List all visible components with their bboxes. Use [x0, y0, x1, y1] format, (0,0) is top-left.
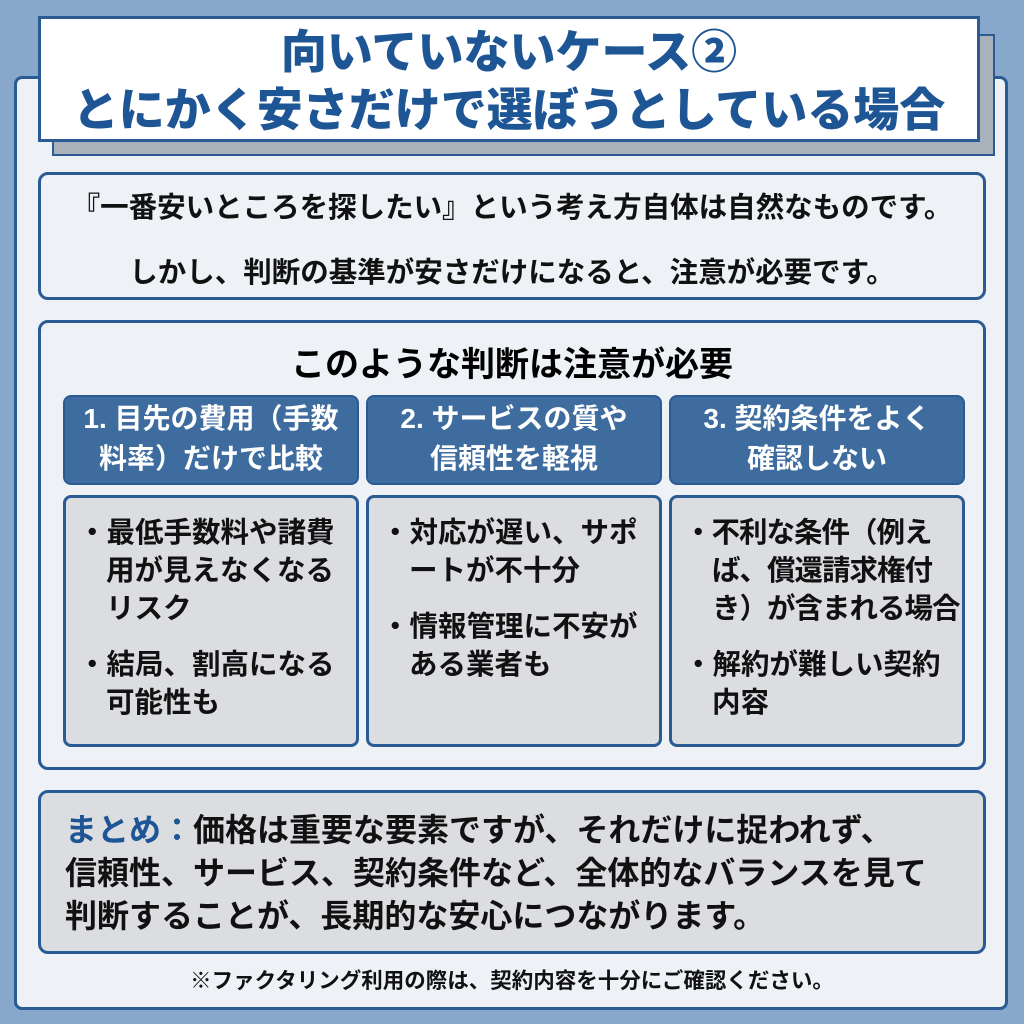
header 3: 3. 契約条件をよく [703, 403, 931, 434]
header 3 [669, 395, 965, 485]
title: 向いていないケース② [281, 26, 737, 78]
content 2 [366, 495, 662, 747]
content 1: ・最低手数料や諸費用が見えなくなるリスク [78, 517, 335, 625]
content 3 [669, 495, 965, 747]
content 2: ・対応が遅い、サポートが不十分 [381, 517, 638, 587]
header 1: 料率）だけで比較 [99, 443, 323, 474]
content 1 [63, 495, 359, 747]
content 3: ・不利な条件（例えば、償還請求権付き）が含まれる場合 [684, 517, 960, 625]
header 2: 2. サービスの質や [400, 403, 628, 434]
header 1 [63, 395, 359, 485]
panel heading: このような判断は注意が必要 [291, 346, 733, 384]
intro text box: しかし、判断の基準が安さだけになると、注意が必要です。 [129, 257, 895, 289]
footnote: ※ファクタリング利用の際は、契約内容を十分にご確認ください。 [190, 969, 834, 993]
summary box: 判断することが、長期的な安心につながります。 [65, 898, 765, 934]
header 2 [366, 395, 662, 485]
header 1: 1. 目先の費用（手数 [83, 403, 339, 434]
content 2: ・情報管理に不安がある業者も [381, 611, 638, 681]
intro text box [38, 172, 986, 300]
summary box: まとめ：価格は重要な要素ですが、それだけに捉われず、 [65, 812, 893, 848]
title [38, 16, 980, 142]
content 1: ・結局、割高になる可能性も [78, 649, 335, 719]
title: とにかく安さだけで選ぼうとしている場合 [73, 84, 945, 136]
content 3: ・解約が難しい契約内容 [684, 649, 941, 719]
intro text box: 『一番安いところを探したい』という考え方自体は自然なものです。 [72, 192, 952, 224]
title shadow [52, 34, 995, 156]
panel: judgments [38, 320, 986, 770]
header 3: 確認しない [747, 443, 887, 474]
summary box [38, 790, 986, 954]
header 2: 信頼性を軽視 [430, 443, 598, 474]
summary box: 信頼性、サービス、契約条件など、全体的なバランスを見て [65, 855, 927, 891]
